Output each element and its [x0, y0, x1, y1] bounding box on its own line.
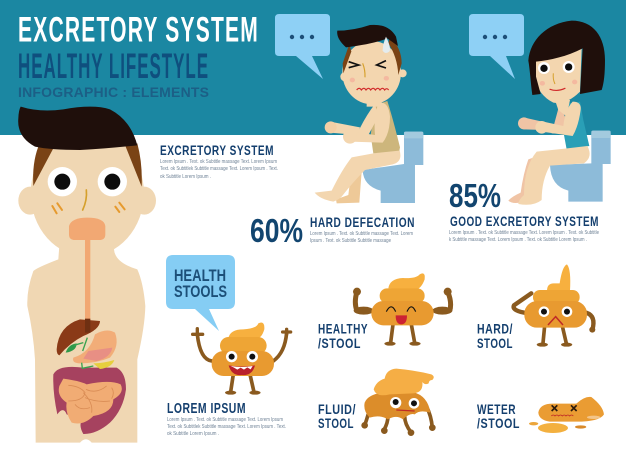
- character: smiling woman on toilet: [508, 21, 611, 205]
- near leg: [518, 146, 590, 205]
- speech bubble: health stools: STOOLS: [174, 283, 227, 301]
- stool: fluid: FLUID/: [318, 401, 356, 417]
- header band: [0, 0, 626, 135]
- legs: [336, 172, 362, 203]
- panel: excretory system text: ok Subtitle Lorem Ipsum .: [160, 174, 211, 180]
- stool: fluid: STOOL: [318, 415, 354, 431]
- text block: lorem ipsum: LOREM IPSUM: [167, 401, 246, 417]
- neck and head: [555, 100, 570, 117]
- stool: weter: /STOOL: [477, 415, 520, 431]
- stat: 60% hard defecation: Lorem Ipsum . Text. ok Subtitle massage Text. Lorem: [310, 231, 413, 237]
- title: EXCRETORY SYSTEM: [18, 10, 259, 50]
- stat: 60% hard defecation: 60%: [250, 212, 303, 249]
- panel: excretory system text: Text. ok Subtitlek Subtitle massage Text. Lorem Ipsum . Text.: [160, 166, 278, 172]
- text block: lorem ipsum: ok Subtitle Lorem Ipsum .: [167, 431, 219, 437]
- speech bubble: man: [275, 14, 330, 79]
- stool: fluid: [318, 369, 436, 436]
- torso: [27, 226, 145, 443]
- text block: lorem ipsum: [167, 401, 286, 437]
- organs: [53, 319, 126, 434]
- speech bubble: health stools: [166, 255, 235, 331]
- toilet: [550, 131, 611, 202]
- arm: [523, 117, 547, 130]
- stat: 85% good excretory system: 85%: [449, 177, 501, 214]
- stool: hard: HARD/: [477, 320, 513, 336]
- stat: 60% hard defecation: Ipsum . Text. ok Subtitle Subtitle massage: [310, 238, 391, 244]
- stool: weter: WETER: [477, 401, 516, 417]
- stool: hard: STOOL: [477, 335, 513, 351]
- head: [18, 107, 156, 257]
- mouth and esophagus: [69, 218, 105, 321]
- stool: weter: [477, 397, 604, 433]
- tank top: [371, 101, 400, 153]
- title: [18, 10, 259, 100]
- stat: 85% good excretory system: k Subtitle massage Text. Lorem Ipsum . Text. ok Subtitle Lorem Ipsum .: [449, 237, 587, 243]
- toilet: [363, 132, 423, 203]
- text block: lorem ipsum: Lorem Ipsum . Text. ok Subtitle massage Text. Lorem Ipsum: [167, 417, 283, 423]
- stat: 85% good excretory system: [449, 177, 599, 243]
- stool: healthy: HEALTHY: [318, 320, 368, 336]
- panel: excretory system text: EXCRETORY SYSTEM: [160, 142, 274, 158]
- body figure with digestive organs: [18, 107, 156, 443]
- title: HEALTHY LIFESTYLE: [18, 47, 209, 86]
- mascot: happy stool: [193, 322, 291, 395]
- swimsuit: [564, 102, 589, 149]
- arms: [357, 104, 378, 135]
- panel: excretory system text: Lorem Ipsum . Text. ok Subtitle massage Text. Lorem Ipsum: [160, 159, 277, 165]
- character: straining man on toilet: [315, 25, 423, 203]
- speech bubble: health stools: HEALTH: [174, 267, 226, 285]
- stat: 60% hard defecation: HARD DEFECATION: [310, 214, 415, 230]
- stool: hard: [477, 264, 595, 351]
- title: INFOGRAPHIC : ELEMENTS: [18, 84, 209, 100]
- speech bubble: woman: [469, 14, 524, 79]
- panel: excretory system text: [160, 142, 278, 180]
- stool: healthy: /STOOL: [318, 335, 361, 351]
- stat: 60% hard defecation: [250, 212, 415, 249]
- text block: lorem ipsum: Text. ok Subtitlek Subtitle massage Text. Lorem Ipsum . Text.: [167, 424, 286, 430]
- stool: healthy: [318, 273, 452, 351]
- head: [340, 72, 350, 81]
- far leg: [508, 157, 537, 203]
